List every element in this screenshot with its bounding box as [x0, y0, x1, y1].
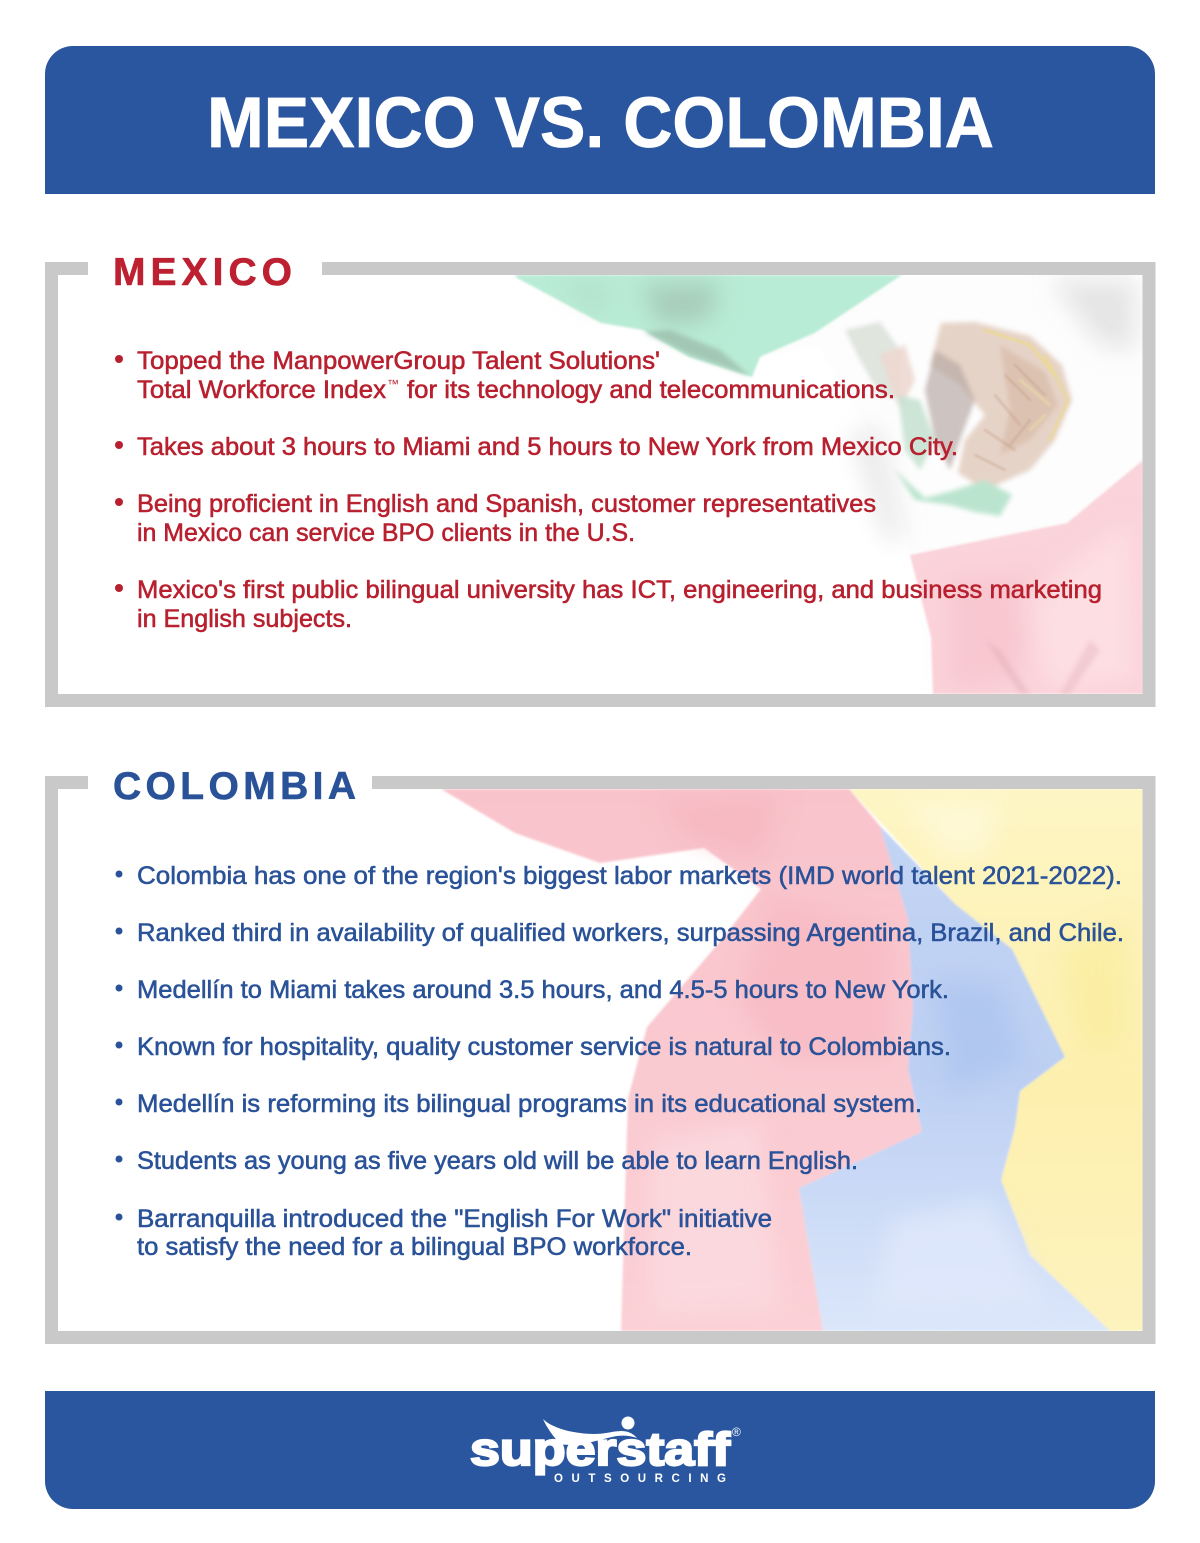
bullet: bilingual representatives [115, 490, 876, 547]
logo: Superstaff Outsourcing: superstaff [470, 1423, 731, 1475]
bullet: bilingual programs: Medellín is reforming its bilingual programs in its educational system. [137, 1090, 922, 1118]
bullet: labor markets: Colombia has one of the region's biggest labor markets (IMD world talent 2021-2022). [137, 862, 1122, 890]
footer banner [45, 1391, 1155, 1509]
flag emblem: eagle and cactus [845, 322, 1072, 516]
bullet: English For Work: Barranquilla introduced the "English For Work" initiative [137, 1205, 772, 1233]
bullet: English For Work: to satisfy the need for a bilingual BPO workforce. [137, 1233, 692, 1261]
panel: Mexico [52, 251, 1149, 700]
bullet list: Colombia [116, 862, 1124, 1261]
title: MEXICO VS. COLOMBIA [207, 84, 994, 163]
Mexican flag background [515, 275, 1143, 694]
logo: Superstaff Outsourcing: OUTSOURCING [554, 1473, 726, 1485]
Colombian flag background [441, 789, 1143, 1331]
bullet: bilingual university: in English subjects. [137, 605, 352, 633]
panel frame: Colombia [52, 782, 1149, 1338]
logo: Superstaff Outsourcing [470, 1416, 741, 1485]
bullet: flight times: Medellín to Miami takes around 3.5 hours, and 4.5-5 hours to New York. [137, 976, 949, 1004]
bullet: flight times: Takes about 3 hours to Miami and 5 hours to New York from Mexico City. [137, 433, 958, 461]
bullet list: Mexico [115, 347, 1102, 633]
bullet: hospitality: Known for hospitality, quality customer service is natural to Colombians. [137, 1033, 951, 1061]
bullet: bilingual representatives: Being proficient in English and Spanish, customer representatives [137, 490, 876, 518]
bullet: English For Work [116, 1205, 772, 1261]
bullet: Total Workforce Index: ™ [387, 377, 399, 391]
bullet: Total Workforce Index: Topped the ManpowerGroup Talent Solutions' [137, 347, 660, 375]
bullet: bilingual representatives: in Mexico can service BPO clients in the U.S. [137, 519, 635, 547]
bullet: bilingual university: Mexico's first public bilingual university has ICT, engineering, and business marketing [137, 576, 1102, 604]
flag shading [640, 275, 1140, 681]
heading: Mexico: MEXICO [113, 251, 292, 294]
panel frame: Mexico [52, 268, 1149, 700]
title banner [45, 46, 1155, 194]
bullet: young students: Students as young as five years old will be able to learn English. [137, 1147, 858, 1175]
bullet: Total Workforce Index [115, 347, 895, 404]
heading: Colombia: COLOMBIA [113, 765, 356, 808]
bullet: Total Workforce Index: for its technology and telecommunications. [407, 376, 895, 404]
logo: Superstaff Outsourcing: ® [732, 1425, 741, 1439]
bullet: bilingual university [115, 576, 1102, 633]
flag shading [650, 795, 1125, 1315]
bullet: Total Workforce Index: Total Workforce Index [137, 376, 387, 404]
bullet: qualified workers: Ranked third in availability of qualified workers, surpassing Argentina, Brazil, and Chile. [137, 919, 1124, 947]
panel: Colombia [52, 765, 1149, 1338]
